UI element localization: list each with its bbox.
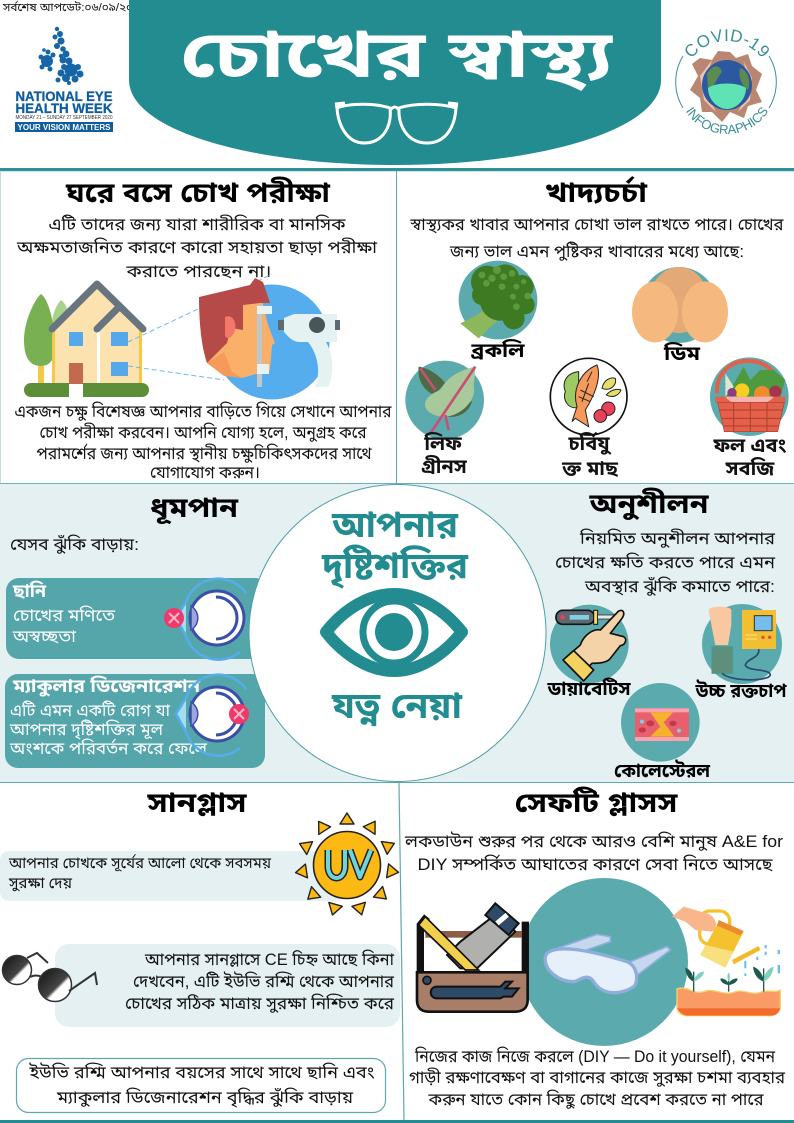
logo: national eye health week: NATIONAL EYE: [16, 89, 112, 104]
description text: পরামর্শের জন্য আপনার স্থানীয় চক্ষুচিকিৎসকদের সাথে: [36, 442, 372, 464]
title banner: [129, 0, 661, 165]
icon: safety goggles: [545, 934, 670, 993]
intro text: চোখের ক্ষতি করতে পারে এমন: [555, 552, 776, 572]
heading: ঘরে বসে চোখ পরীক্ষা: [65, 176, 331, 208]
update date: সর্বশেষ আপডেট:০৬/০৯/২০: [2, 0, 133, 14]
card: cataract: [6, 578, 268, 660]
callout: CE mark: দেখবেন, এটি ইউভি রশ্মি থেকে আপনার: [133, 971, 395, 991]
icon: eye: [326, 594, 462, 671]
callout: CE mark: [55, 944, 400, 1027]
label: fruit and vegetables: ফল এবং: [713, 435, 787, 457]
icon: eye with macular degeneration: [176, 675, 249, 756]
callout: UV risk: [16, 1058, 386, 1112]
label: leafy greens: [421, 431, 468, 478]
callout: UV risk: ম্যাকুলার ডিজেনারেশন বৃদ্ধির ঝুঁকি বাড়ায়: [56, 1087, 353, 1108]
description text: একজন চক্ষু বিশেষজ্ঞ আপনার বাড়িতে গিয়ে সেখানে আপনার: [14, 401, 392, 422]
label: eggs: ডিম: [663, 341, 701, 365]
description text: [14, 401, 392, 482]
card: macular degeneration: এটি এমন একটি রোগ যা: [10, 700, 170, 720]
description text: গাড়ী রক্ষণাবেক্ষণ বা বাগানের কাজে সুরক্ষা চশমা ব্যবহার: [409, 1067, 786, 1088]
card: cataract: ছানি: [12, 581, 47, 601]
logo: national eye health week: MONDAY 21 – SUNDAY 27 SEPTEMBER 2020: [16, 115, 113, 121]
description text: করুন যাতে কোন কিছু চোখে প্রবেশ করতে না পারে: [428, 1089, 764, 1110]
callout: UV risk: ইউভি রশ্মি আপনার বয়সের সাথে সাথে ছানি এবং: [28, 1062, 375, 1082]
panel: smoking: [5, 492, 268, 768]
intro text: [16, 214, 377, 281]
icon: toolbox: [417, 903, 528, 1012]
label: fruit and vegetables: [713, 435, 787, 480]
icon: diabetes: [550, 605, 629, 683]
label: leafy greens: লিফ: [423, 431, 462, 455]
label: oily fish: চর্বিযু: [567, 431, 612, 455]
panel: exercise: [547, 487, 787, 782]
heading: সানগ্লাস: [146, 787, 248, 818]
logo: covid-19 infographics: INFOGRAPHICS: [686, 107, 768, 134]
card: macular degeneration: ম্যাকুলার ডিজেনারেশন: [12, 676, 201, 697]
icon: fish plate: [550, 358, 627, 435]
label: high blood pressure: উচ্চ রক্তচাপ: [695, 680, 787, 702]
heading: অনুশীলন: [588, 487, 709, 521]
description text: চোখ পরীক্ষা করবেন। আপনি যোগ্য হলে, অনুগ্রহ করে: [40, 422, 367, 443]
icon: round sunglasses: [2, 953, 97, 1002]
icon: blood pressure monitor: [702, 604, 782, 684]
circle background: [520, 878, 688, 1046]
intro text: নিয়মিত অনুশীলন আপনার: [579, 528, 776, 549]
heading: take care of your eyesight: [321, 504, 469, 590]
icon: basket of vegetables: [710, 357, 789, 436]
description text: যোগাযোগ করুন।: [150, 463, 260, 482]
icon: cholesterol artery: [621, 683, 700, 762]
label: cholesterol: কোলেস্টেরল: [614, 760, 711, 782]
intro text: অক্ষমতাজনিত কারণে কারো সহায়তা ছাড়া পরীক্ষা: [16, 237, 377, 257]
card: macular degeneration: আপনার দৃষ্টিশক্তির মূল: [9, 719, 164, 740]
icon: eggs: [632, 267, 728, 343]
card: macular degeneration: [5, 674, 265, 768]
heading: খাদ্যচর্চা: [545, 175, 648, 208]
description text: নিজের কাজ নিজে করলে (DIY — Do it yourself), যেমন: [414, 1046, 776, 1066]
text: care: যত্ন নেয়া: [331, 685, 463, 726]
panel: home eye test: [14, 176, 392, 482]
panel: safety glasses: [404, 786, 786, 1110]
label: broccoli: ব্রকলি: [470, 338, 525, 362]
description text: [409, 1046, 786, 1110]
intro text: জন্য ভাল এমন পুষ্টিকর খাবারের মধ্যে আছে:: [449, 241, 744, 262]
heading: সেফটি গ্লাসস: [514, 786, 679, 818]
icon: eye with cataract: [164, 579, 246, 660]
label: oily fish: ক্ত মাছ: [561, 458, 619, 480]
intro text: লকডাউন শুরুর পর থেকে আরও বেশি মানুষ A&E for: [404, 831, 783, 852]
icon: broccoli: [459, 261, 537, 339]
label: oily fish: [561, 431, 619, 480]
icon: UV sun: [295, 813, 399, 917]
logo: national eye health week: [15, 27, 113, 132]
intro text: এটি তাদের জন্য যারা শারীরিক বা মানসিক: [48, 214, 346, 234]
label: fruit and vegetables: সবজি: [725, 456, 775, 480]
label: diabetes: ডায়াবেটিস: [547, 677, 631, 700]
callout: CE mark: আপনার সানগ্লাসে CE চিহ্ন আছে কিনা: [144, 949, 394, 969]
logo: national eye health week: HEALTH WEEK: [16, 101, 113, 116]
callout: sun protection: সুরক্ষা দেয়: [8, 875, 73, 892]
icon: house: [24, 274, 272, 397]
callout: sun protection: আপনার চোখকে সূর্যের আলো থেকে সবসময়: [8, 854, 272, 872]
icon: watering can and plants: [672, 907, 780, 1016]
heading: take care of your eyesight: আপনার: [331, 504, 459, 545]
card: cataract: অস্বচ্ছতা: [12, 627, 77, 646]
intro text: [404, 831, 783, 874]
intro text: যেসব ঝুঁকি বাড়ায়:: [10, 534, 139, 555]
intro text: [555, 528, 776, 597]
panel: diet: [405, 175, 789, 480]
logo: covid-19 infographics: COVID-19: [685, 29, 769, 56]
card: cataract: চোখের মণিতে: [13, 605, 116, 625]
icon: glasses: [335, 104, 458, 143]
intro text: DIY সম্পর্কিত আঘাতের কারণে সেবা নিতে আসছে: [418, 853, 773, 874]
intro text: [410, 215, 784, 262]
intro text: অবস্থার ঝুঁকি কমাতে পারে:: [584, 576, 775, 597]
label: leafy greens: গ্রীনস: [421, 454, 468, 478]
logo: national eye health week: YOUR VISION MATTERS: [18, 123, 111, 132]
intro text: স্বাস্থ্যকর খাবার আপনার চোখা ভাল রাখতে পারে। চোখের: [410, 215, 784, 234]
intro text: করাতে পারছেন না।: [125, 262, 272, 281]
title: চোখের স্বাস্থ্য: [180, 17, 614, 91]
heading: ধূমপান: [150, 492, 239, 525]
callout: sun protection: [0, 851, 345, 901]
callout: CE mark: চোখের সঠিক মাত্রায় সুরক্ষা নিশ্চিত করে: [125, 993, 395, 1014]
icon: leafy greens: [405, 361, 484, 439]
logo: covid-19 infographics: [675, 29, 777, 134]
header: [2, 0, 777, 165]
heading: take care of your eyesight: দৃষ্টিশক্তির: [321, 545, 469, 590]
panel: sunglasses: [0, 787, 400, 1112]
icon: person at slit lamp: [199, 278, 340, 400]
panel: central eye care circle: [249, 484, 546, 782]
card: macular degeneration: অংশকে পরিবর্তন করে ফেলে: [9, 737, 208, 758]
